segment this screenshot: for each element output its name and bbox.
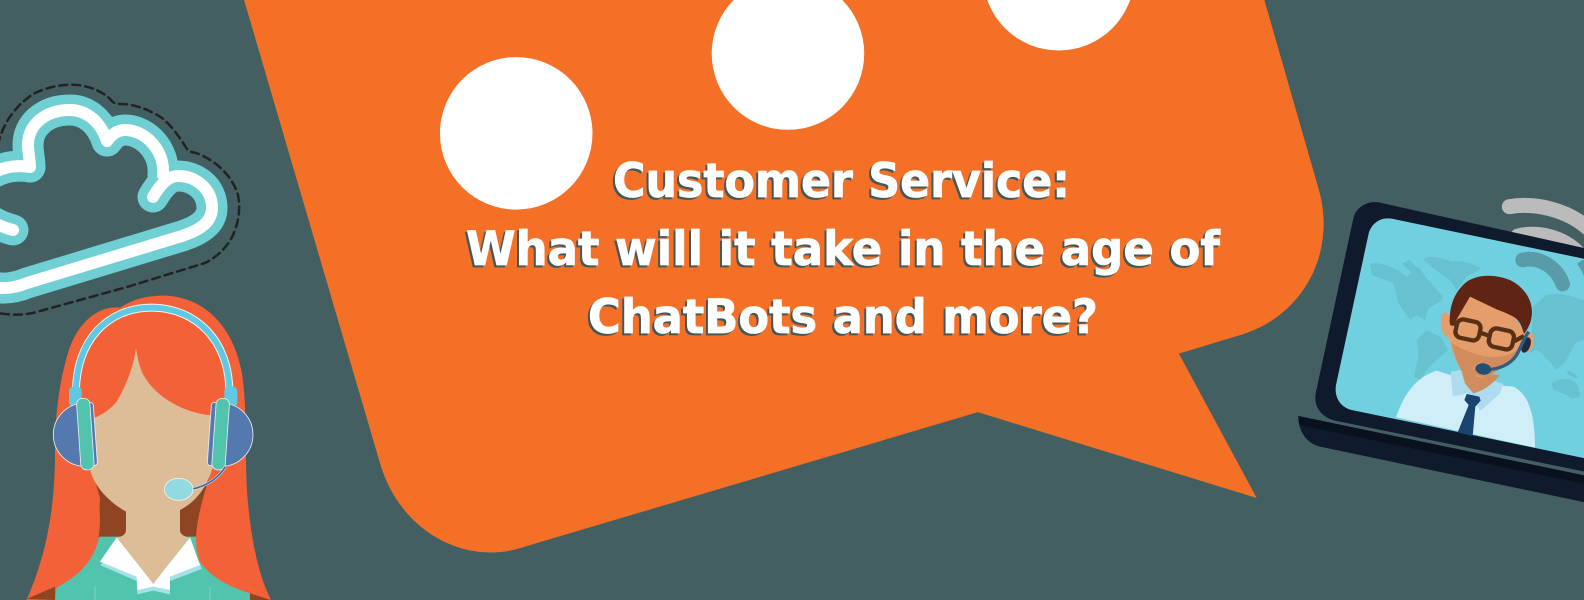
agent shirt bbox=[1396, 371, 1535, 448]
hair dark tip right bbox=[250, 593, 271, 600]
screen bbox=[1336, 218, 1584, 459]
hair lock dark tip left bbox=[27, 587, 55, 600]
earpiece bbox=[1519, 336, 1533, 354]
agent head bbox=[1439, 276, 1536, 393]
microphone arm bbox=[193, 467, 225, 489]
shirt lines bbox=[95, 587, 210, 600]
headset arm bbox=[1485, 332, 1529, 370]
collar shadow bbox=[100, 560, 202, 594]
shirt bbox=[55, 537, 250, 600]
right ear bbox=[1521, 332, 1536, 354]
neck bbox=[1462, 372, 1500, 393]
hair bbox=[1450, 276, 1532, 334]
microphone bbox=[164, 478, 193, 500]
title: Customer Service: bbox=[613, 154, 1070, 209]
title: ChatBots and more? bbox=[588, 290, 1098, 345]
collar bbox=[100, 537, 200, 590]
wifi arcs back bbox=[1509, 205, 1584, 253]
ear caps bbox=[69, 386, 82, 407]
laptop base bbox=[1298, 416, 1584, 503]
glasses bbox=[1451, 318, 1524, 351]
illustration: laptop with video call agent bbox=[1298, 202, 1584, 503]
left ear bbox=[1439, 312, 1454, 338]
laptop frame bbox=[1315, 202, 1584, 473]
microphone bbox=[1475, 362, 1492, 376]
hair bbox=[27, 296, 271, 600]
neck shadow bbox=[92, 465, 213, 538]
inner strip left bbox=[85, 402, 98, 466]
base dark strip bbox=[1298, 416, 1584, 485]
shirt collar bbox=[1451, 370, 1503, 411]
face bbox=[1449, 295, 1525, 384]
inner strip right bbox=[207, 402, 220, 466]
band right bbox=[212, 398, 230, 470]
wifi arc fragment bbox=[1580, 262, 1584, 283]
title: What will it take in the age of bbox=[466, 222, 1221, 277]
illustration: woman with headset bbox=[27, 296, 271, 600]
world map bbox=[1370, 257, 1584, 398]
wifi arc front bbox=[1523, 259, 1563, 284]
headband bbox=[76, 308, 229, 392]
icon: cloud bbox=[0, 85, 239, 315]
speech bubble with typing dots bbox=[243, 0, 1324, 552]
ear cup left bbox=[52, 404, 81, 466]
face and neck bbox=[91, 348, 217, 584]
hair lock left bbox=[27, 442, 100, 600]
title bbox=[466, 154, 1221, 345]
beard shadow bbox=[1452, 343, 1524, 384]
tie bbox=[1458, 394, 1481, 436]
band left bbox=[76, 398, 94, 470]
hair lock right bbox=[196, 445, 271, 599]
ear cup right bbox=[225, 404, 254, 466]
